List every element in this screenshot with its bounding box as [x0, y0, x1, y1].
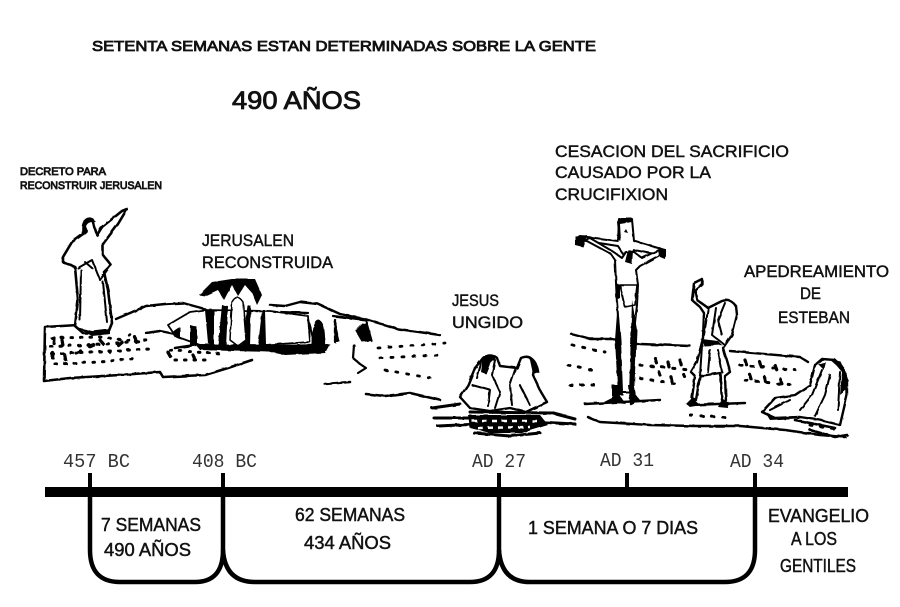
towers and arches: [205, 305, 266, 347]
date labels: [63, 450, 784, 473]
label: cessation of sacrifice: CRUCIFIXION: [555, 186, 668, 204]
illustration: Stephen kneeling: [762, 359, 847, 437]
label: stoning of Stephen: [744, 263, 889, 327]
timeline bar and brackets: [45, 473, 848, 582]
text: 62 weeks, 434 years: 62 SEMANAS: [295, 505, 405, 525]
illustration: man issuing decree on hill: [44, 209, 252, 381]
illustration: Jesus anointed figures: [432, 355, 575, 436]
bracket: 7 weeks: [90, 495, 223, 582]
text: gospel to the gentiles: EVANGELIO: [768, 506, 869, 526]
illustration: rebuilt Jerusalem city: [116, 279, 445, 400]
prophet figure: [63, 209, 127, 333]
hills behind city: [116, 302, 440, 335]
label: decree: DECRETO PARA: [20, 166, 107, 178]
date labels: 408 BC: [192, 451, 257, 473]
text: 7 weeks, 490 years: 490 AÑOS: [104, 539, 191, 560]
date labels: AD 34: [730, 451, 784, 473]
label: Jesus anointed: UNGIDO: [452, 314, 523, 332]
bracket: 62 weeks: [223, 495, 499, 582]
city walls: [168, 310, 310, 345]
date labels: 457 BC: [63, 451, 130, 473]
label: Jerusalem rebuilt: [202, 232, 333, 272]
cross: [577, 219, 665, 262]
water: [432, 404, 575, 436]
text: 62 weeks, 434 years: 434 AÑOS: [304, 532, 391, 553]
label: cessation of sacrifice: CAUSADO POR LA: [555, 164, 711, 182]
label: decree: [20, 166, 162, 192]
text: 1 week or 7 days: 1 SEMANA O 7 DIAS: [528, 518, 698, 538]
label: cessation of sacrifice: [555, 143, 789, 204]
label: decree: RECONSTRUIR JERUSALEN: [20, 180, 162, 192]
date labels: AD 27: [472, 451, 526, 473]
label: Jerusalem rebuilt: RECONSTRUIDA: [202, 254, 333, 272]
label: Jesus anointed: JESUS: [452, 292, 499, 310]
text: 7 weeks, 490 years: 7 SEMANAS: [101, 515, 201, 535]
illustration: crucifixion and ridge: [568, 218, 845, 437]
label: Jesus anointed: [452, 292, 523, 332]
illustration: man casting a stone: [686, 279, 737, 408]
crucified figure: [585, 238, 660, 392]
date labels: AD 31: [600, 450, 654, 472]
text: 62 weeks, 434 years: [295, 505, 405, 553]
text: gospel to the gentiles: [768, 506, 869, 576]
ridge and ground: [571, 334, 845, 437]
title: SETENTA SEMANAS ESTAN DETERMINADAS SOBRE LA GENTE: [92, 38, 596, 55]
base of cross: [600, 385, 640, 405]
label: stoning of Stephen: APEDREAMIENTO: [744, 263, 889, 281]
label: cessation of sacrifice: CESACION DEL SACRIFICIO: [555, 143, 789, 161]
label: stoning of Stephen: DE: [800, 285, 821, 303]
bracket: 1 week: [499, 495, 755, 582]
text: 7 weeks, 490 years: [101, 515, 201, 560]
text: gospel to the gentiles: A LOS: [791, 529, 837, 549]
text: gospel to the gentiles: GENTILES: [780, 556, 856, 576]
main axis: [45, 487, 848, 497]
ground ledge: [44, 325, 252, 381]
ticks: [88, 473, 92, 489]
label: Jerusalem rebuilt: JERUSALEN: [202, 232, 294, 250]
label: stoning of Stephen: ESTEBAN: [778, 309, 850, 327]
heading: 490 years: 490 AÑOS: [232, 86, 361, 115]
